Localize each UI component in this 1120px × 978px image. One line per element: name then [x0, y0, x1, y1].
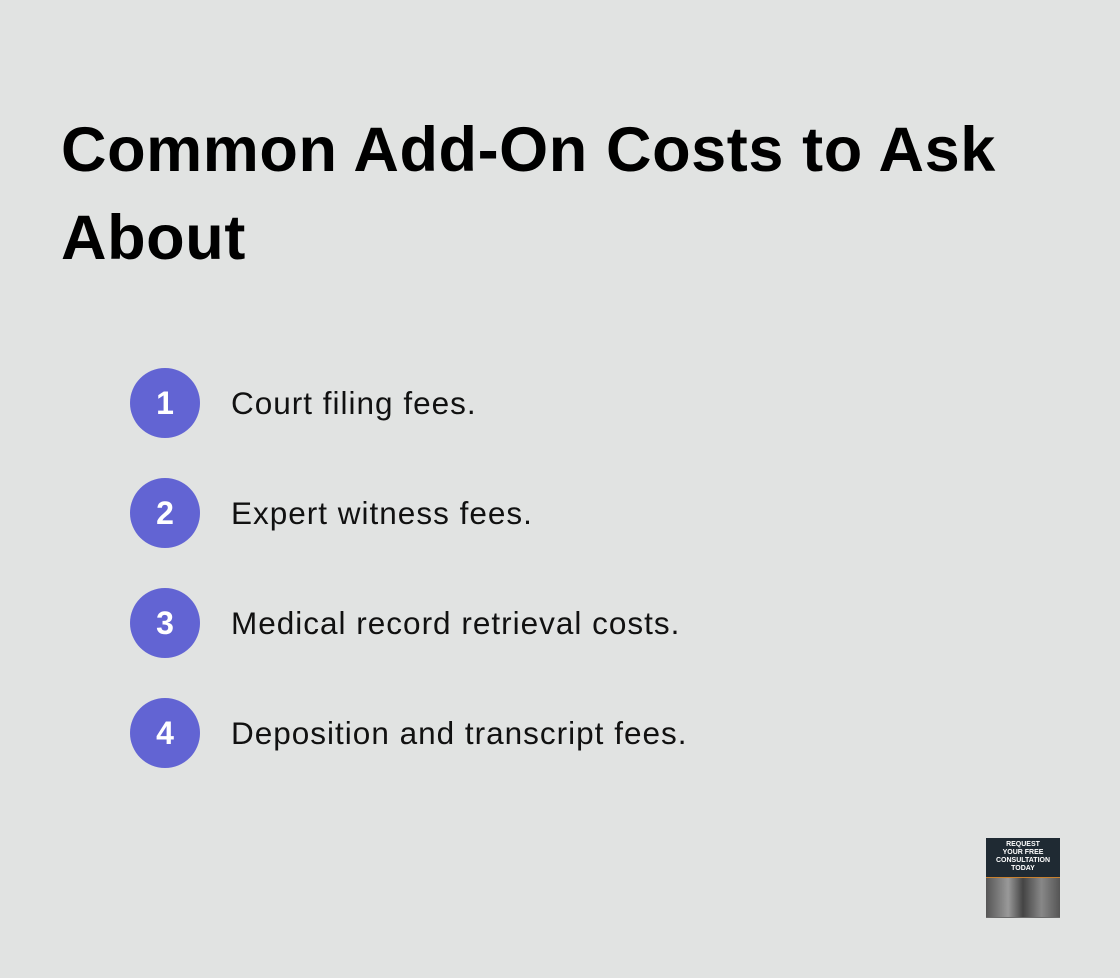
item 1: Court filing fees.: [231, 385, 477, 421]
item 3: 3: [156, 605, 174, 641]
item 2: [130, 478, 533, 548]
badge: consultation: CONSULTATION: [996, 857, 1050, 864]
item 3: Medical record retrieval costs.: [231, 605, 680, 641]
badge: consultation: REQUEST: [1006, 841, 1040, 848]
badge: consultation: [986, 838, 1060, 918]
title: Common Add-On Costs to Ask About: [61, 115, 996, 273]
item 2: 2: [156, 495, 174, 531]
item 4: [130, 698, 687, 768]
item 1: [130, 368, 477, 438]
item 4: 4: [156, 715, 174, 751]
item 2: Expert witness fees.: [231, 495, 533, 531]
item 4: Deposition and transcript fees.: [231, 715, 687, 751]
badge: consultation: YOUR FREE: [1003, 849, 1043, 856]
item 1: 1: [156, 385, 174, 421]
badge: consultation: TODAY: [1011, 865, 1035, 872]
item 3: [130, 588, 680, 658]
